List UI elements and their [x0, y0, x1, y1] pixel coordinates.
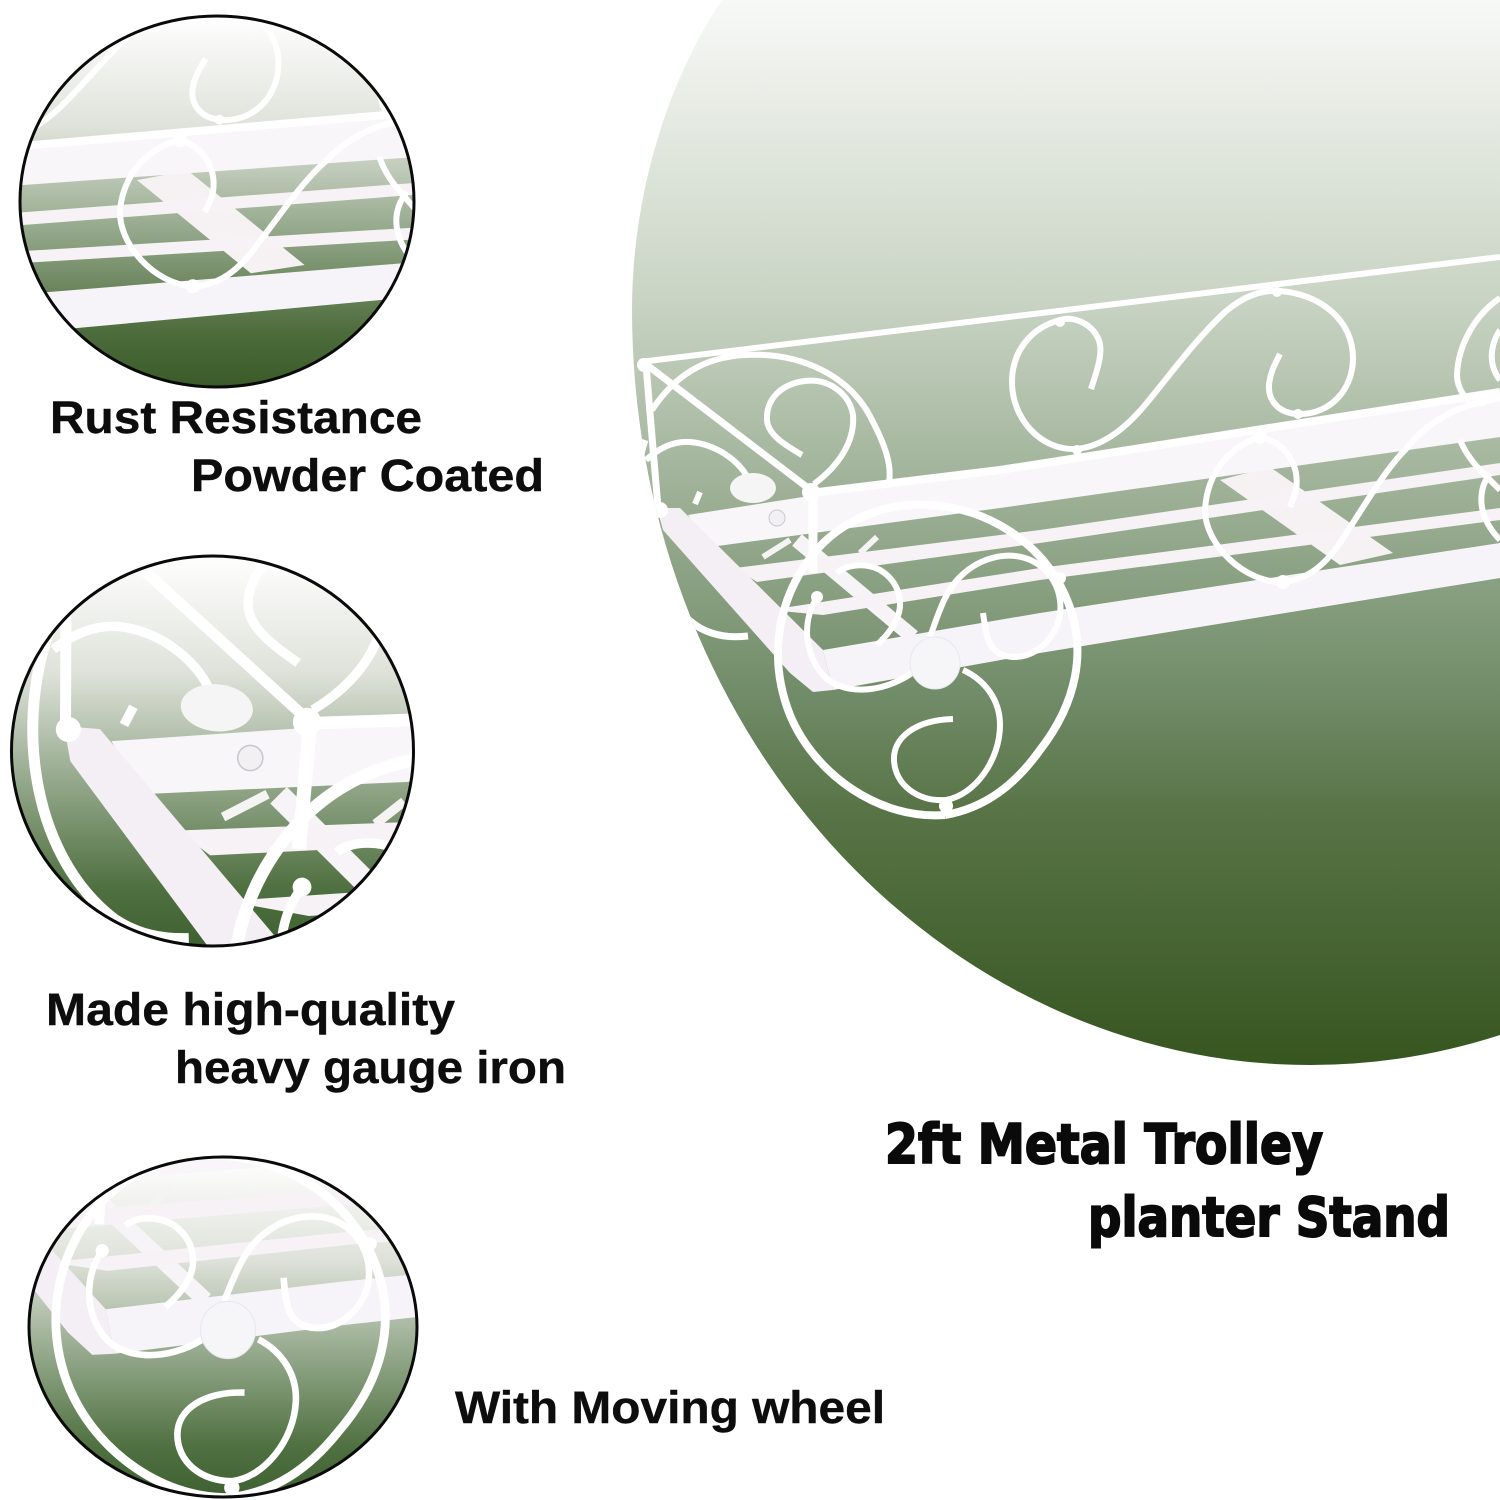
title: 2ft metal trolley planter stand: [885, 1113, 1450, 1249]
caption: rust resistance powder coated: Powder Coated: [191, 450, 544, 501]
title: 2ft metal trolley planter stand: 2ft Metal Trolley: [885, 1113, 1323, 1176]
detail circle: heavy gauge iron frame: [10, 554, 415, 948]
title: 2ft metal trolley planter stand: planter Stand: [1088, 1186, 1450, 1249]
caption: made high-quality heavy gauge iron: Made high-quality: [46, 984, 455, 1035]
detail circle: moving wheel: [28, 1156, 418, 1498]
caption: with moving wheel: With Moving wheel: [455, 1382, 885, 1433]
caption: rust resistance powder coated: [50, 392, 544, 501]
caption: made high-quality heavy gauge iron: [46, 984, 566, 1093]
caption: rust resistance powder coated: Rust Resistance: [50, 392, 422, 443]
main circle: trolley planter photo: [632, 0, 1500, 1065]
caption: made high-quality heavy gauge iron: heavy gauge iron: [175, 1042, 566, 1093]
detail circle: rust resistance: [18, 14, 416, 388]
